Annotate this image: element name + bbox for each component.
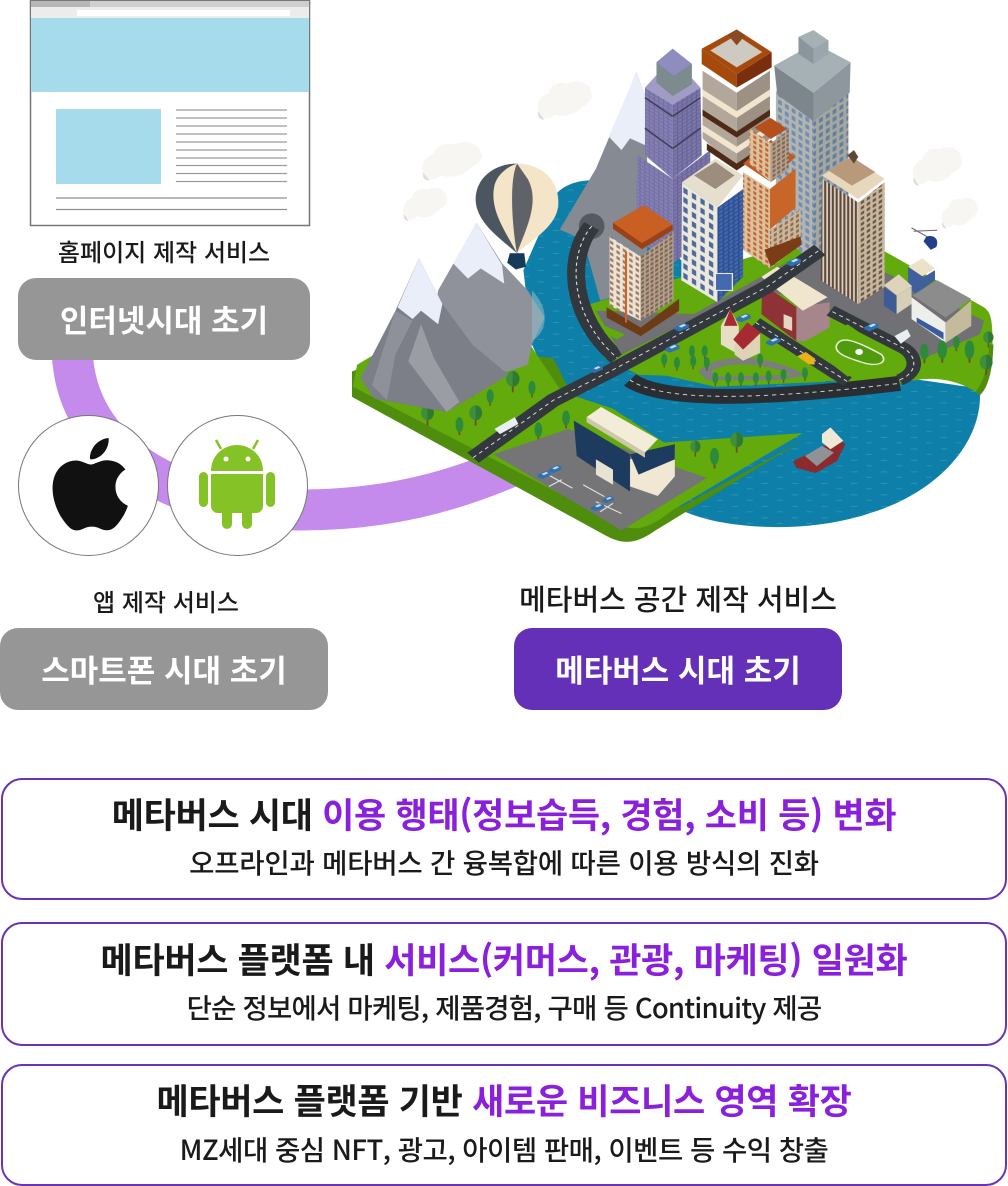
ship: [793, 427, 845, 473]
button: early metaverse era: [514, 628, 842, 710]
vehicles: [494, 258, 911, 434]
water: [523, 180, 980, 527]
land platform: [352, 240, 993, 542]
plaza ground: [596, 243, 984, 358]
description: MZ세대 중심 NFT, 광고, 아이템 판매, 이벤트 등 수익 창출: [180, 1128, 828, 1168]
icon: apple circle: [18, 416, 158, 556]
label: metaverse service: 메타버스 공간 제작 서비스: [519, 577, 837, 619]
icon: android circle: [168, 416, 308, 556]
button: early internet era: 인터넷시대 초기: [60, 296, 268, 341]
purple tower: [636, 49, 710, 263]
orange-roof tower: [604, 205, 679, 339]
button: early smartphone era: [0, 628, 328, 710]
panel: service unification: [1, 922, 1007, 1046]
trees: [421, 331, 993, 469]
panel: usage behavior change: [1, 778, 1007, 900]
description: 단순 정보에서 마케팅, 제품경험, 구매 등 Continuity 제공: [187, 986, 821, 1026]
orange tower: [743, 118, 801, 268]
heading: 메타버스 플랫폼 내 서비스(커머스, 관광, 마케팅) 일원화: [101, 933, 907, 984]
panel: new business expansion: [1, 1064, 1007, 1186]
heading: 메타버스 플랫폼 기반 새로운 비즈니스 영역 확장: [156, 1074, 852, 1125]
button: early internet era: [18, 278, 310, 360]
button: early smartphone era: 스마트폰 시대 초기: [41, 646, 287, 691]
button: early metaverse era: 메타버스 시대 초기: [555, 646, 801, 691]
tan tower: [821, 150, 885, 304]
label: homepage service: 홈페이지 제작 서비스: [58, 233, 270, 268]
back mountain: [560, 72, 647, 301]
small buildings right: [884, 258, 971, 343]
park and field: [647, 321, 899, 387]
road: tunnel curve: [576, 226, 617, 358]
connector: purple curved band: [72, 345, 530, 510]
label: app service: 앱 제작 서비스: [93, 583, 239, 618]
supermarket: [494, 407, 707, 530]
browser wireframe: homepage: [30, 0, 310, 226]
roads: [473, 250, 914, 458]
helicopter: [912, 228, 937, 250]
isometric city illustration: [352, 29, 993, 542]
clouds: [403, 81, 978, 228]
heading: 메타버스 시대 이용 행태(정보습득, 경험, 소비 등) 변화: [112, 788, 896, 839]
description: 오프라인과 메타버스 간 융복합에 따른 이용 방식의 진화: [189, 841, 819, 881]
brown striped tower: [702, 29, 772, 170]
church: [721, 309, 761, 361]
grey tower: [774, 30, 851, 263]
front mountains: [360, 223, 545, 412]
hot air balloon: [476, 164, 558, 269]
red school building: [761, 267, 830, 341]
white and blue tower: [681, 159, 743, 302]
